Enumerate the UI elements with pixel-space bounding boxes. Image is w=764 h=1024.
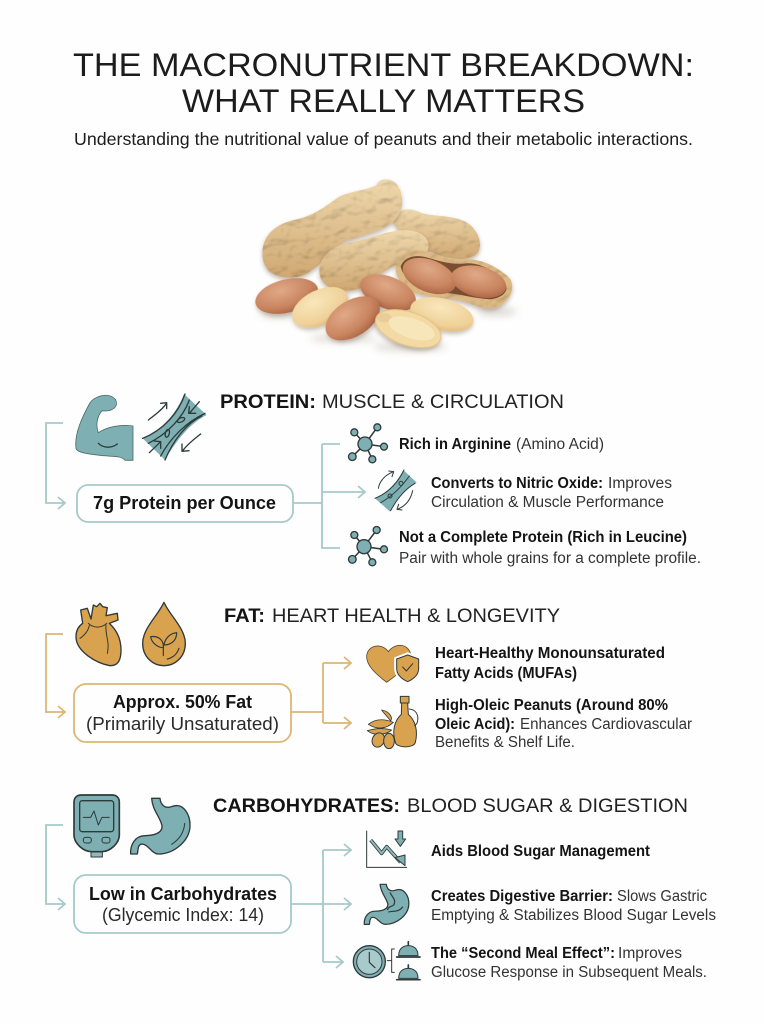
item: complete protein: Not a Complete Protein (Rich in Leucine) [399,529,687,546]
callout: 7g protein: 7g Protein per Ounce [93,493,276,513]
icon: anatomical heart [76,603,121,666]
icon: clock and cloches [353,942,420,980]
icon: oil drop with sprout [143,602,185,666]
item: digestive barrier: Emptying & Stabilizes Blood Sugar Levels [431,907,716,924]
item: digestive barrier: Slows Gastric [617,888,707,905]
icon: vessel small [375,470,417,512]
icon: stomach [131,798,190,854]
panel: protein [46,392,701,567]
item: complete protein [348,526,701,567]
connector: protein branches [293,444,365,548]
item: high oleic: Benefits & Shelf Life. [435,734,575,751]
shell: middle [319,230,429,291]
icon: stomach small [364,884,409,924]
connector: muscle to box [46,423,65,509]
item: second meal: Improves [618,945,682,962]
heading: fat: HEART HEALTH & LONGEVITY [272,606,560,627]
item: high oleic: High-Oleic Peanuts (Around 80% [435,697,668,714]
icon: glucose meter [74,795,119,857]
item: arginine: Rich in Arginine [399,436,511,453]
callout: 50% fat: (Primarily Unsaturated) [86,714,279,734]
callout: 50% fat [74,684,291,742]
heading: protein [220,392,564,413]
item: digestive barrier [364,884,716,924]
icon: molecule [348,526,387,566]
heading: fat: FAT: [224,606,265,627]
illustration: peanuts [252,179,517,355]
title: THE MACRONUTRIENT BREAKDOWN: [73,47,694,83]
callout: 50% fat: Approx. 50% Fat [113,692,252,712]
heading: protein: PROTEIN: [220,392,316,413]
icon: heart and shield [367,645,420,683]
item: second meal: Glucose Response in Subsequent Meals. [431,964,707,981]
item: complete protein: Pair with whole grains for a complete profile. [399,550,701,567]
subtitle: Understanding the nutritional value of peanuts and their metabolic interactions. [74,129,693,149]
title [73,47,694,119]
heading: protein: MUSCLE & CIRCULATION [322,392,564,413]
item: nitric oxide: Converts to Nitric Oxide: [431,475,603,492]
panel: carbohydrates [46,795,716,981]
connector: carb branches [291,844,351,968]
item: high oleic: Oleic Acid): [435,716,515,733]
item: mufas [367,645,665,683]
item: second meal: The “Second Meal Effect”: [431,945,615,962]
item: nitric oxide [375,470,672,512]
panel: fat [46,602,692,751]
item: mufas: Heart-Healthy Monounsaturated [435,645,665,662]
item: nitric oxide: Circulation & Muscle Performance [431,494,664,511]
item: digestive barrier: Creates Digestive Barrier: [431,888,613,905]
connector: fat branches [291,657,351,729]
callout: low carbs: Low in Carbohydrates [89,884,277,904]
heading: carbohydrates: CARBOHYDRATES: [213,796,400,817]
shell: back right [393,209,480,259]
icon: falling chart [367,831,407,867]
heading: carbohydrates: BLOOD SUGAR & DIGESTION [407,796,688,817]
item: high oleic: Enhances Cardiovascular [520,716,692,733]
open shell [396,250,512,308]
callout: 7g protein [77,485,293,522]
item: blood sugar [367,831,650,867]
icon: blood vessel [143,394,207,460]
icon: olive oil [367,696,418,749]
item: arginine [348,424,604,463]
callout: low carbs: (Glycemic Index: 14) [102,905,264,925]
icon: molecule [348,424,387,463]
item: nitric oxide: Improves [608,475,672,492]
item: arginine: (Amino Acid) [516,436,604,453]
item: high oleic [367,696,692,751]
title: WHAT REALLY MATTERS [182,83,585,119]
icon: flexed muscle [76,395,133,460]
heading: carbohydrates [213,796,688,817]
connector: heart to box [46,634,65,718]
shell: large [262,179,402,278]
callout: low carbs [74,875,291,933]
item: second meal [353,942,707,981]
kernels [252,267,477,355]
connector: meter to box [46,825,65,910]
item: blood sugar: Aids Blood Sugar Management [431,843,650,860]
item: mufas: Fatty Acids (MUFAs) [435,665,577,682]
